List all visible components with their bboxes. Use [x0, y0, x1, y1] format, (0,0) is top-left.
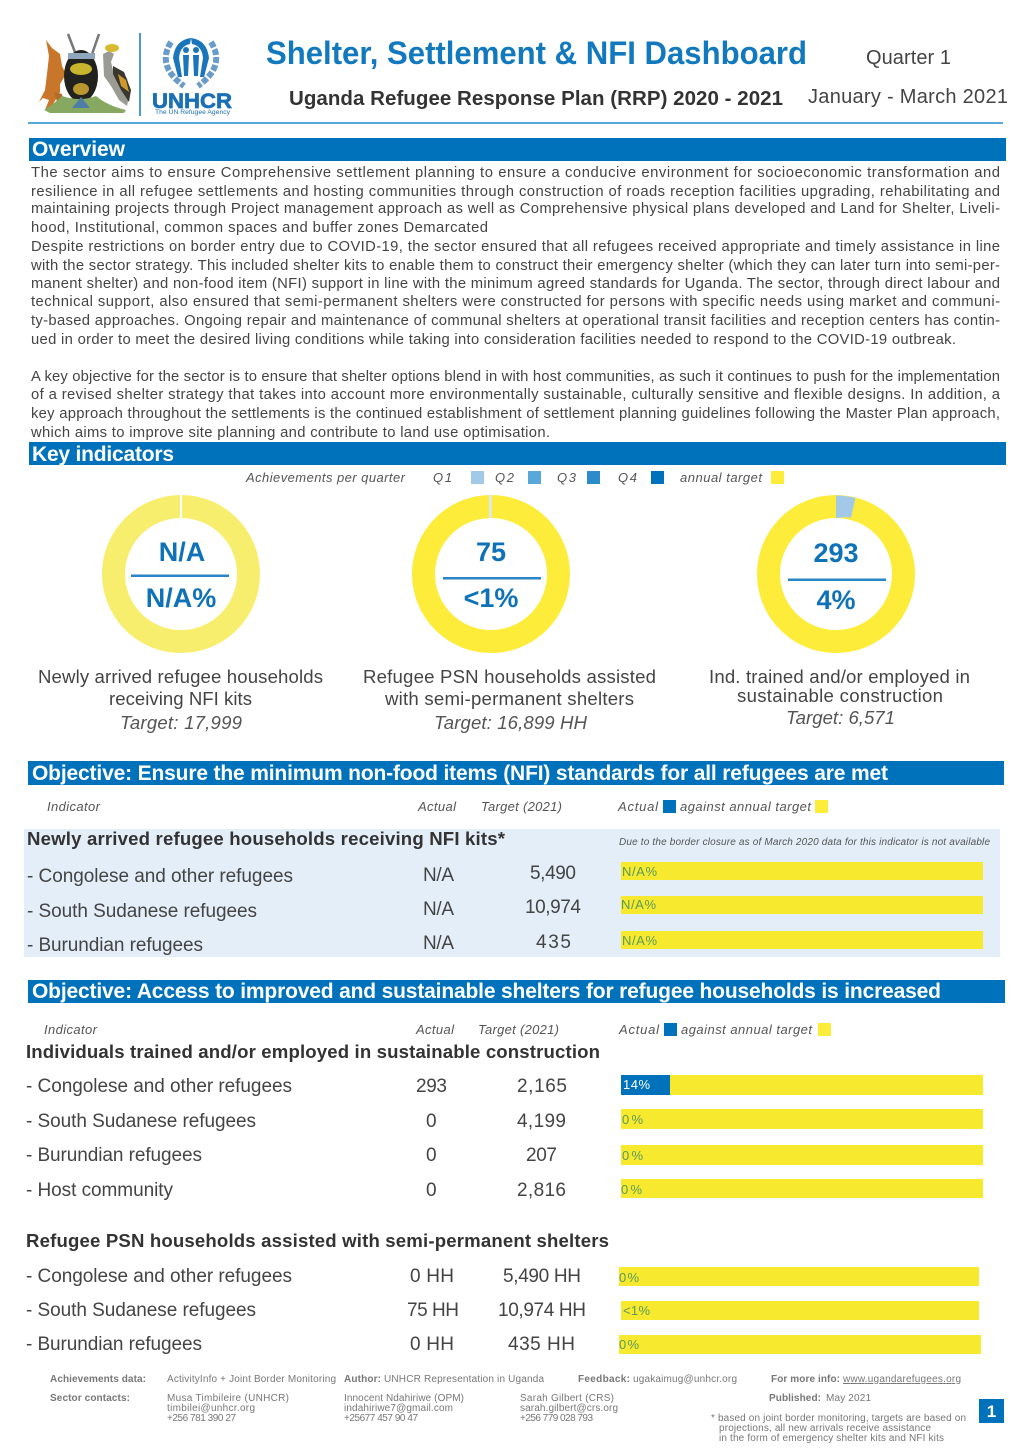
table: individuals trained: 4,199 [517, 1111, 566, 1132]
table header: objective 1: Indicator [47, 799, 101, 814]
table: individuals trained: 0 [426, 1111, 437, 1132]
table header: objective 2: Target (2021) [478, 1022, 559, 1037]
indicator label 2: Target: 16,899 HH [434, 712, 588, 733]
footer: sources and contacts [50, 1374, 961, 1424]
date range: January - March 2021 [808, 86, 1008, 108]
table: individuals trained: 2,165 [517, 1076, 567, 1097]
table: refugee PSN households [26, 1230, 609, 1355]
donut: refugee PSN households [424, 495, 558, 642]
indicator label 1: Newly arrived refugee households [38, 666, 323, 687]
table header: objective 1: Actual [417, 799, 457, 814]
bar chart: individuals trained: 14% [623, 1077, 650, 1092]
footer: sources and contacts: For more info: [771, 1374, 840, 1385]
text block: overview: key approach throughout the settlements is the continued establishment of settlement planning guidelines following the Master Plan approach, [31, 406, 1000, 422]
text block: overview: resilience in all refugee settlements and hosting communities through construction of roads reception facilities upgrading, rehabilitating and [31, 184, 1000, 200]
panel: overview heading: Overview [32, 138, 126, 161]
indicator label 2: with semi-permanent shelters [384, 688, 634, 709]
legend: achievements per quarter: Q4 [618, 470, 637, 485]
table: individuals trained: 293 [416, 1076, 447, 1097]
donut: individuals trained [768, 496, 904, 642]
footer: sources and contacts: ActivityInfo + Joint Border Monitoring [167, 1374, 336, 1385]
footer: sources and contacts: Musa Timbileire (UNHCR) [167, 1393, 289, 1404]
text block: overview: Despite restrictions on border entry due to COVID-19, the sector ensured that all refugees received appropriate and timely assistance in line [31, 239, 1000, 255]
table header: objective 2: Actual [415, 1022, 455, 1037]
bar chart: NFI kits: N/A% [621, 897, 656, 912]
donut: refugee PSN households: 75 [476, 537, 506, 567]
legend: achievements per quarter: annual target [680, 470, 763, 485]
footer: sources and contacts: www.ugandarefugees.org [842, 1374, 961, 1385]
table: NFI kits: - Congolese and other refugees [27, 866, 293, 887]
logo: UNHCR emblem and wordmark [152, 38, 232, 116]
indicator label 2: Refugee PSN households assisted [363, 666, 656, 687]
panel: objective 1 heading: Objective: Ensure the minimum non-food items (NFI) standards for all refugees are met [32, 762, 888, 785]
table: NFI kits: 435 [536, 932, 571, 953]
bar chart: individuals trained [621, 1075, 983, 1198]
panel: key indicators heading [29, 442, 1006, 466]
footer: sources and contacts: Published: [769, 1393, 821, 1404]
indicator label 3: Target: 6,571 [786, 707, 895, 728]
donut: individuals trained: 4% [816, 585, 856, 615]
bar chart: refugee PSN households [619, 1267, 981, 1354]
bar chart: individuals trained: 0% [621, 1182, 642, 1197]
text block: overview: A key objective for the sector is to ensure that shelter options blend in with host communities, as such it continues to push for the implementation [31, 369, 1000, 385]
table: individuals trained: 207 [526, 1145, 557, 1166]
donut: newly arrived refugee households: N/A% [146, 583, 216, 613]
table: NFI kits: N/A [423, 899, 454, 920]
donut: newly arrived refugee households [114, 494, 248, 642]
footer: sources and contacts: +256 779 028 793 [520, 1413, 593, 1424]
text block: overview: of a revised shelter strategy that takes into account more environmentally sustainable, culturally sensitive and flexible designs. In addition, a [31, 387, 1001, 403]
legend: achievements per quarter: Q3 [557, 470, 577, 485]
bar chart: refugee PSN households: <1% [623, 1303, 650, 1318]
page number [979, 1399, 1004, 1423]
table header: objective 1 [47, 799, 828, 814]
footer: sources and contacts: sarah.gilbert@crs.org [520, 1403, 618, 1414]
table: individuals trained: Individuals trained and/or employed in sustainable construction [26, 1041, 600, 1062]
table: refugee PSN households: 435 HH [508, 1334, 575, 1355]
table: individuals trained: 0 [426, 1180, 437, 1201]
indicator label 1: Target: 17,999 [120, 712, 242, 733]
table header: objective 2: Actual [618, 1022, 660, 1037]
donut: refugee PSN households: <1% [464, 583, 518, 613]
text block: overview: hood, Institutional, common spaces and buffer zones Demarcated [31, 220, 488, 236]
panel: objective 2 heading: Objective: Access to improved and sustainable shelters for refugee households is increased [32, 980, 941, 1003]
indicator label 3 [709, 666, 970, 728]
footer: sources and contacts: indahiriwe7@gmail.com [344, 1403, 453, 1414]
indicator label 3: sustainable construction [737, 685, 943, 706]
footnote [711, 1413, 966, 1444]
text block: overview: maintaining projects through Project management approach as well as Comprehensive physical plans developed and Land for Shelter, Liveli- [31, 201, 1000, 217]
title: Shelter, Settlement & NFI Dashboard [266, 35, 807, 71]
table: NFI kits: Due to the border closure as of March 2020 data for this indicator is not available [619, 837, 990, 848]
logo: UNHCR emblem and wordmark: The UN Refugee Agency [155, 110, 230, 116]
text block: overview [30, 165, 1001, 441]
footer: sources and contacts: May 2021 [826, 1393, 871, 1404]
bar chart: NFI kits: N/A% [622, 864, 657, 879]
table: refugee PSN households: 0 HH [410, 1266, 454, 1287]
table: individuals trained: 0 [426, 1145, 437, 1166]
indicator label 1: receiving NFI kits [109, 688, 252, 709]
table: refugee PSN households: 0 HH [410, 1334, 454, 1355]
table: individuals trained [26, 1041, 600, 1201]
quarter label: Quarter 1 [866, 47, 951, 69]
text block: overview: ued in order to meet the desired living conditions while taking into consideration facilities needed to respond to the COVID-19 outbreak. [31, 332, 956, 348]
text block: overview: manent shelter) and non-food item (NFI) support in line with the minimum agreed standards for Uganda. The sector, through direct labour and [31, 276, 1000, 292]
table: NFI kits: - Burundian refugees [27, 935, 203, 956]
logo: Uganda coat of arms [39, 34, 131, 113]
text block: overview: The sector aims to ensure Comprehensive settlement planning to ensure a conducive environment for socioeconomic transformation and [31, 165, 1000, 181]
legend: achievements per quarter [245, 470, 784, 485]
table: NFI kits [27, 828, 990, 956]
footnote: in the form of emergency shelter kits and NFI kits [719, 1433, 944, 1444]
footer: sources and contacts: Sector contacts: [50, 1393, 130, 1404]
table: refugee PSN households: Refugee PSN households assisted with semi-permanent shelters [26, 1230, 609, 1251]
table header: objective 1: Target (2021) [481, 799, 562, 814]
page number: 1 [987, 1402, 996, 1421]
table: refugee PSN households: - Congolese and other refugees [26, 1266, 292, 1287]
bar chart: NFI kits [621, 862, 983, 949]
table header: objective 1: Actual [617, 799, 659, 814]
footer: sources and contacts: +256 781 390 27 [167, 1413, 236, 1424]
bar chart: individuals trained: 0% [622, 1148, 643, 1163]
table: NFI kits: - South Sudanese refugees [27, 901, 257, 922]
table: individuals trained: 2,816 [517, 1180, 566, 1201]
logo divider [139, 33, 141, 116]
table: individuals trained: - South Sudanese refugees [26, 1111, 256, 1132]
legend: achievements per quarter: Q1 [433, 470, 452, 485]
bar chart: individuals trained: 0% [622, 1112, 643, 1127]
table: NFI kits: Newly arrived refugee households receiving NFI kits* [27, 828, 506, 849]
table header: objective 1: against annual target [680, 799, 812, 814]
footnote: projections, all new arrivals receive assistance [719, 1423, 931, 1434]
text block: overview: with the sector strategy. This included shelter kits to enable them to construct their emergency shelter (which they can later turn into semi-per- [30, 258, 1000, 274]
indicator label 1 [38, 666, 323, 733]
donut: newly arrived refugee households: N/A [159, 537, 205, 567]
footer: sources and contacts: Feedback: [578, 1374, 630, 1385]
text block: overview: which aims to improve site planning and contribute to land use optimisation. [30, 425, 550, 441]
indicator label 3: Ind. trained and/or employed in [709, 666, 970, 687]
header rule [28, 122, 1003, 124]
table: NFI kits: 5,490 [530, 863, 576, 884]
panel: NFI table background [24, 829, 1000, 957]
indicator label 2 [363, 666, 656, 733]
table: refugee PSN households: - Burundian refugees [26, 1334, 202, 1355]
footer: sources and contacts: ugakaimug@unhcr.org [633, 1374, 737, 1385]
footer: sources and contacts: Achievements data: [50, 1374, 146, 1385]
footer: sources and contacts: +25677 457 90 47 [344, 1413, 418, 1424]
subtitle: Uganda Refugee Response Plan (RRP) 2020 - 2021 [289, 87, 783, 110]
table: refugee PSN households: - South Sudanese refugees [26, 1300, 256, 1321]
footer: sources and contacts: Innocent Ndahiriwe (OPM) [344, 1393, 464, 1404]
text block: overview: technical support, also ensured that semi-permanent shelters were constructed for persons with specific needs using market and communi- [31, 294, 1000, 310]
bar chart: NFI kits: N/A% [622, 933, 657, 948]
table header: objective 2: Indicator [44, 1022, 98, 1037]
table: NFI kits: N/A [423, 933, 454, 954]
table header: objective 2 [44, 1022, 831, 1037]
footer: sources and contacts: Author: [344, 1374, 381, 1385]
panel: overview heading [29, 138, 1006, 161]
footer: sources and contacts: Sarah Gilbert (CRS) [520, 1393, 614, 1404]
table: individuals trained: - Burundian refugees [26, 1145, 202, 1166]
footer: sources and contacts: timbilei@unhcr.org [167, 1403, 255, 1414]
legend: achievements per quarter: Achievements per quarter [245, 470, 406, 485]
text block: overview: ty-based approaches. Ongoing repair and maintenance of communal shelters at operational transit facilities and reception centers has contin- [31, 313, 1000, 329]
bar chart: refugee PSN households: 0% [619, 1337, 639, 1352]
footer: sources and contacts: UNHCR Representation in Uganda [384, 1374, 544, 1385]
panel: key indicators heading: Key indicators [32, 443, 174, 466]
table: individuals trained: - Host community [26, 1180, 174, 1201]
table: NFI kits: 10,974 [525, 897, 581, 918]
table: refugee PSN households: 5,490 HH [503, 1266, 581, 1287]
bar chart: refugee PSN households: 0% [619, 1270, 639, 1285]
table: NFI kits: N/A [423, 865, 454, 886]
donut: individuals trained: 293 [813, 538, 859, 568]
table: refugee PSN households: 75 HH [407, 1300, 459, 1321]
table: individuals trained: - Congolese and other refugees [26, 1076, 292, 1097]
footnote: * based on joint border monitoring, targets are based on [711, 1413, 966, 1424]
table: refugee PSN households: 10,974 HH [498, 1300, 586, 1321]
table header: objective 2: against annual target [681, 1022, 813, 1037]
legend: achievements per quarter: Q2 [495, 470, 515, 485]
logo: UNHCR emblem and wordmark: UNHCR [152, 90, 232, 113]
